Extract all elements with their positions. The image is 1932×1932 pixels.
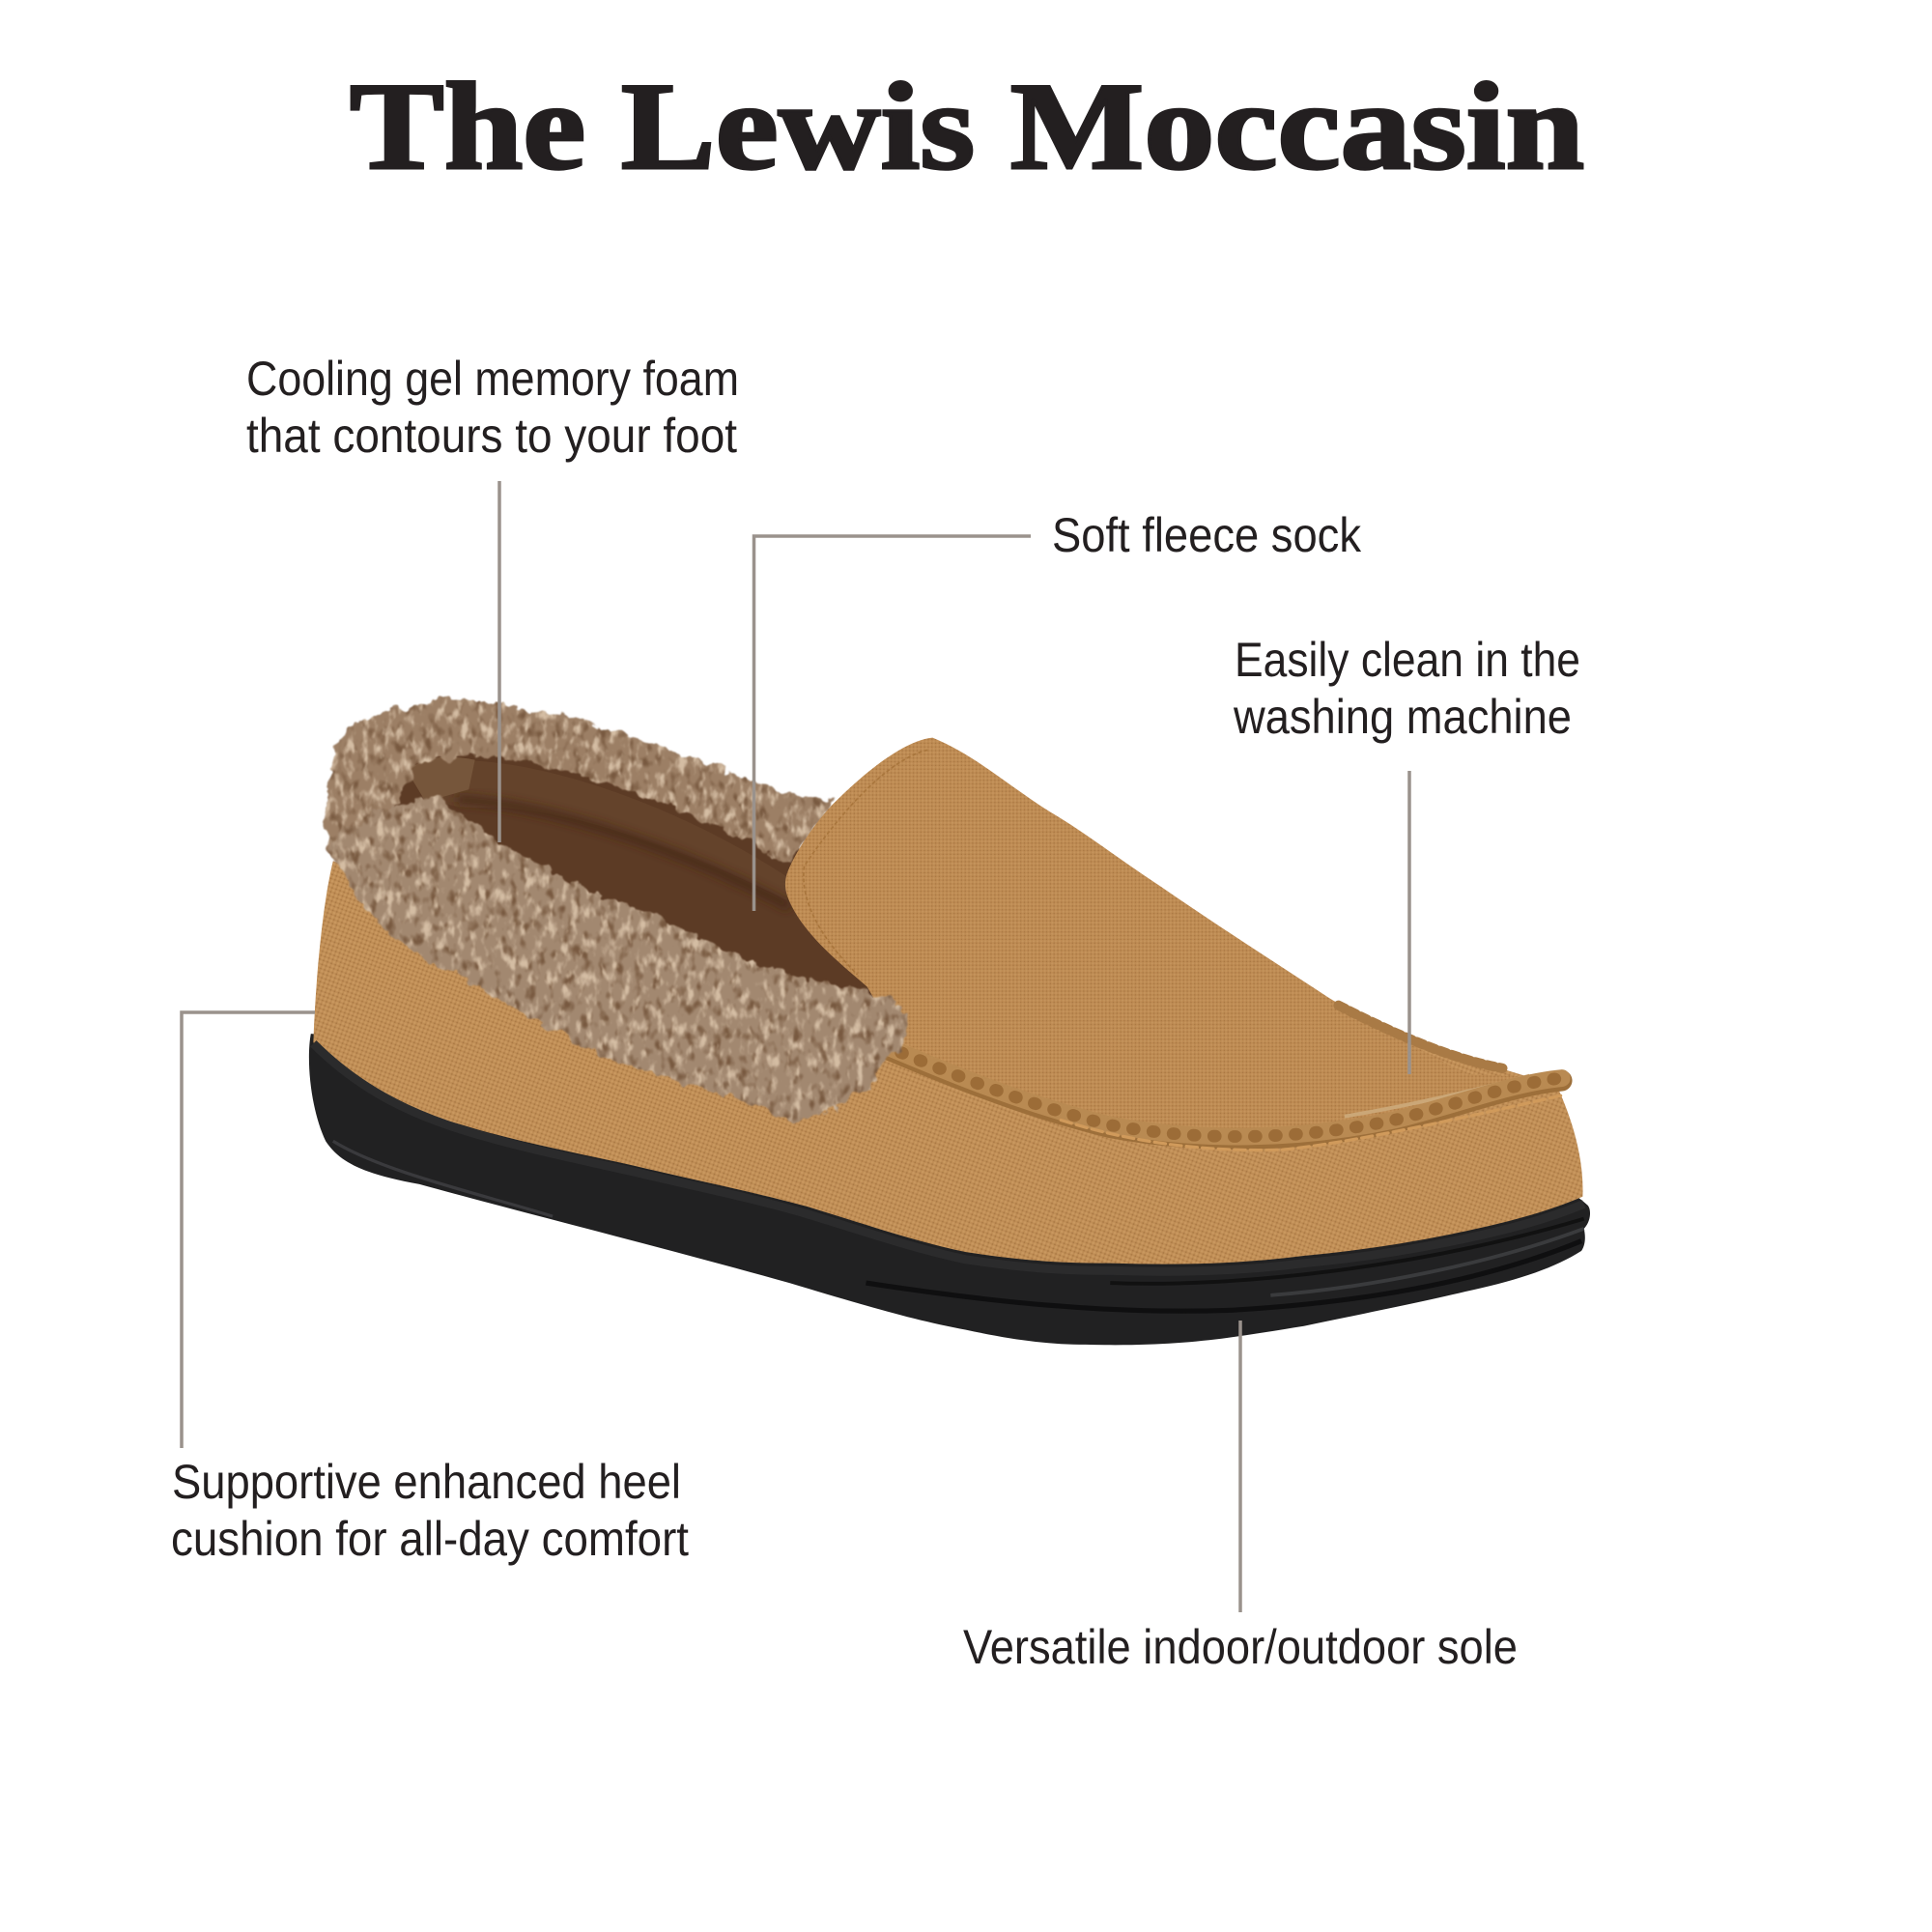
label: Versatile indoor/outdoor sole — [963, 1620, 1518, 1674]
label — [171, 1455, 689, 1566]
vamp panel — [785, 738, 1564, 1141]
leader line — [753, 536, 1031, 911]
callout: heel cushion — [171, 1012, 689, 1566]
callout: soft fleece sock — [753, 508, 1362, 911]
front fleece collar — [328, 798, 907, 1120]
sole piping and grooves — [313, 1043, 1584, 1311]
label: Supportive enhanced heel — [172, 1455, 681, 1509]
vamp edge stitching — [804, 750, 927, 975]
leader line — [182, 1012, 315, 1448]
label: Cooling gel memory foam — [246, 352, 739, 406]
leader line — [1407, 771, 1411, 1074]
interior fleece lining — [370, 743, 907, 1024]
back fleece collar — [326, 696, 834, 864]
title: The Lewis Moccasin — [350, 57, 1584, 195]
label — [1233, 633, 1580, 744]
outsole — [309, 1034, 1590, 1345]
label — [246, 352, 739, 463]
leader line — [1238, 1321, 1242, 1612]
moc toe rope seam — [886, 1006, 1562, 1151]
label: Easily clean in the — [1235, 633, 1580, 687]
callout: cooling gel memory foam — [246, 352, 739, 842]
label: washing machine — [1233, 690, 1572, 744]
callout: washing machine — [1233, 633, 1580, 1074]
label: that contours to your foot — [246, 409, 737, 463]
product illustration: moccasin slipper — [309, 696, 1590, 1345]
label: cushion for all-day comfort — [171, 1512, 689, 1566]
leader line — [497, 481, 501, 842]
pale fabric band along the toe — [1345, 1076, 1529, 1117]
upper body — [313, 861, 1583, 1264]
label: Soft fleece sock — [1052, 508, 1362, 562]
